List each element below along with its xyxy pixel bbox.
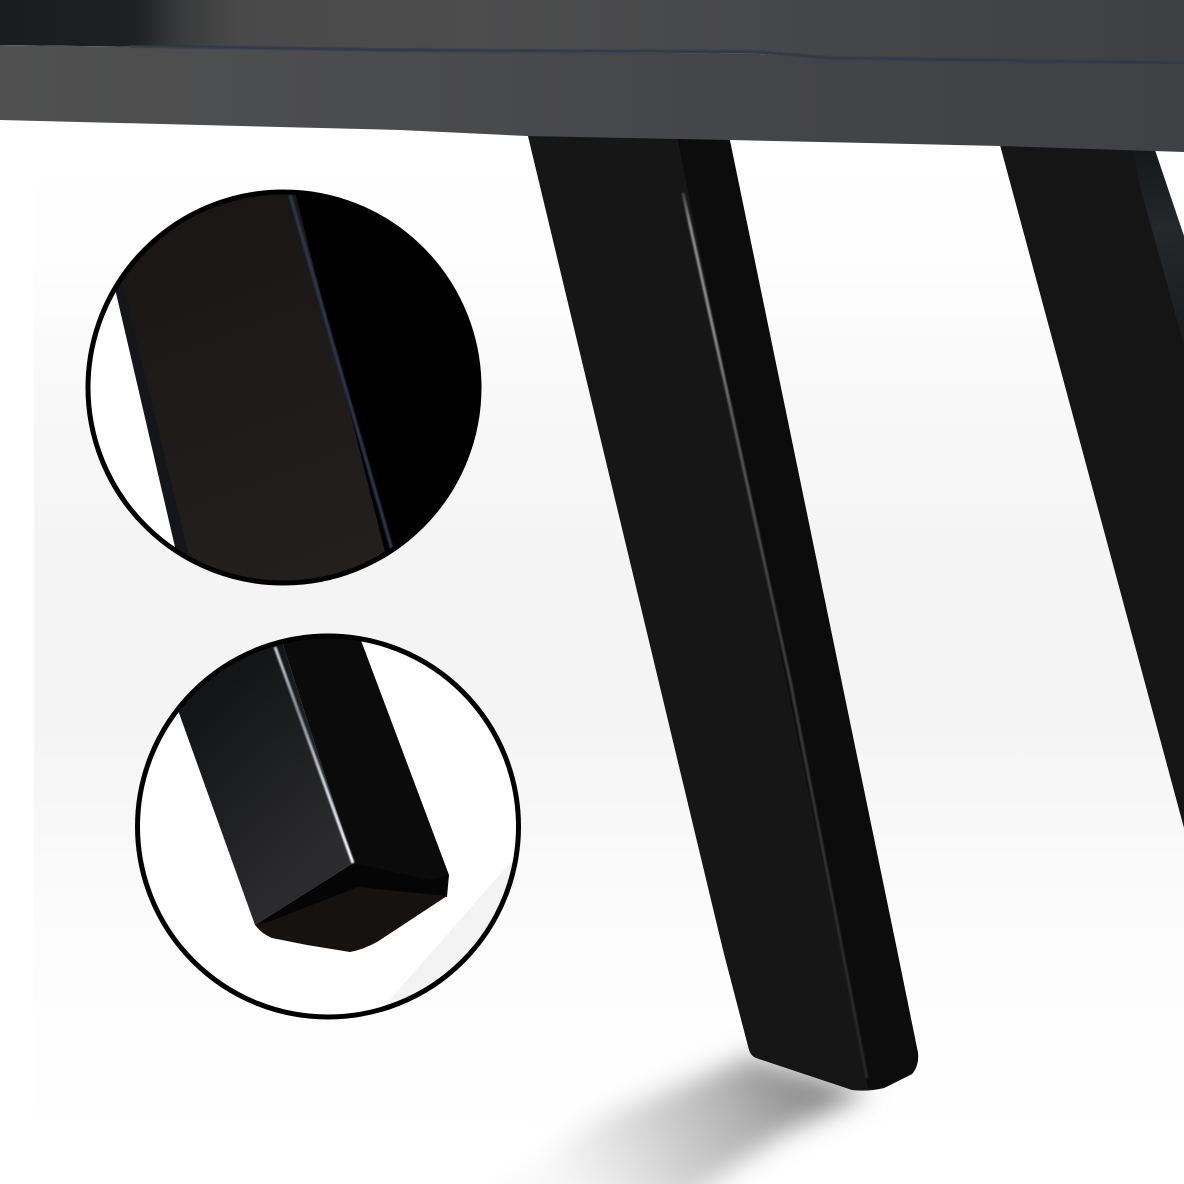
foot left face [178, 644, 353, 925]
second table leg, cropped at right edge [1000, 145, 1184, 828]
main leg right face [677, 136, 918, 1089]
table top front edge [0, 45, 1184, 152]
dark left edge [113, 280, 190, 560]
callout circle: leg surface close-up [86, 190, 482, 586]
blue edge highlight line [130, 46, 1184, 63]
foot right face [282, 638, 449, 897]
floor shadow under main leg [480, 1056, 870, 1184]
glossy ridge highlight [275, 647, 353, 863]
callout circle: leg foot close-up [138, 620, 530, 1030]
second leg side face [1133, 150, 1184, 345]
table top surface [0, 0, 1184, 64]
foot chamfer [255, 863, 449, 928]
faint floor wedge [386, 863, 512, 1005]
blue ridge line [290, 195, 393, 553]
black side face [296, 195, 476, 552]
brown-black leg face [122, 194, 385, 580]
main table leg [527, 132, 918, 1091]
felt sole pad [255, 887, 447, 952]
main leg ridge highlight [683, 193, 867, 1078]
